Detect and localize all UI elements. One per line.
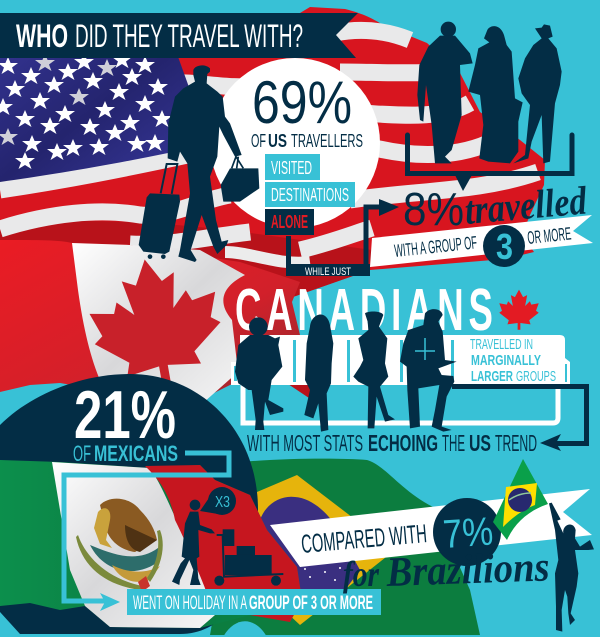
- text: travelled in marginally larger groups: LARGER: [471, 368, 513, 385]
- stat: 69% of US travellers: 69%: [252, 69, 352, 136]
- text: travelled in marginally larger groups: TRAVELLED IN: [470, 336, 533, 353]
- title banner: WHO: [16, 18, 68, 54]
- icon: woman holding flag: [549, 503, 594, 632]
- label: alone: ALONE: [271, 212, 308, 232]
- banner: compared with 7%: 7%: [442, 510, 495, 557]
- flag: United States: [0, 7, 545, 300]
- banner: compared with 7%: COMPARED WITH: [300, 518, 428, 559]
- stat: 21% of Mexicans: MEXICANS: [94, 441, 178, 466]
- icon: woman with luggage trolley: [172, 500, 283, 586]
- label: destinations: [265, 182, 355, 207]
- white circle callout: [210, 58, 380, 228]
- stat: 21% of Mexicans: [73, 377, 178, 466]
- speech bubble: x3: [200, 487, 236, 515]
- speech bubble: x3: X3: [215, 494, 230, 511]
- label: destinations: DESTINATIONS: [271, 185, 349, 205]
- text: travelled in marginally larger groups: [470, 336, 556, 385]
- title banner: DID THEY TRAVEL WITH?: [75, 18, 303, 54]
- label: visited: VISITED: [271, 158, 312, 178]
- text: travelled in marginally larger groups: GROUPS: [516, 368, 556, 385]
- text: echoing the US trend: US: [469, 430, 491, 456]
- title banner: [0, 13, 358, 58]
- stat: 69% of US travellers: TRAVELLERS: [291, 131, 363, 151]
- icon: plus: [415, 338, 435, 360]
- text: echoing the US trend: WITH MOST STATS: [247, 430, 363, 456]
- connector arrow: while just: WHILE JUST: [305, 266, 351, 278]
- bottom strip: [0, 635, 600, 637]
- bracket pointer: [408, 135, 572, 191]
- connector arrow: to US trend: [452, 386, 586, 451]
- flag: Mexico: [0, 460, 302, 628]
- text: echoing the US trend: ECHOING: [368, 430, 438, 456]
- script text: for Brazilians: for: [343, 554, 380, 594]
- stat: 21% of Mexicans: 21%: [74, 377, 176, 453]
- icon: small Brazilian flag: [493, 459, 548, 540]
- text: echoing the US trend: TREND: [495, 430, 537, 456]
- banner: group of 3: [370, 215, 593, 267]
- icon: Mexican eagle: [76, 499, 163, 592]
- text: echoing the US trend: THE: [442, 430, 465, 456]
- dark circle panel: [0, 374, 258, 634]
- script text: for Brazilians: Brazilions: [385, 544, 550, 596]
- text: travelled in marginally larger groups: MARGINALLY: [471, 352, 541, 369]
- icon: man walking with luggage: [139, 65, 259, 262]
- stat: 69% of US travellers: OF: [251, 131, 266, 151]
- banner: group of 3: WITH A GROUP OF: [393, 232, 478, 261]
- flag: Canada: [0, 240, 318, 405]
- icon: maple leaf: [499, 290, 539, 330]
- label bar: went on holiday: GROUP OF 3 OR MORE: [249, 593, 373, 614]
- connector arrow: Mexicans: [64, 453, 229, 611]
- teal hump bottom: [223, 621, 267, 637]
- label: visited: [265, 154, 320, 180]
- label bar: went on holiday: [127, 589, 381, 615]
- stat: 69% of US travellers: US: [268, 131, 287, 151]
- banner: group of 3: 3: [496, 226, 513, 267]
- banner: compared with 7%: [270, 489, 592, 567]
- seat panel: [231, 335, 570, 423]
- icon: seated people: [235, 309, 457, 432]
- icon: group of three travellers: [417, 22, 562, 163]
- heading: Canadians: CANADIANS: [235, 278, 493, 343]
- flag: Brazil: [210, 459, 480, 635]
- label: alone: [265, 209, 314, 235]
- heading: 8% travelled: 8%: [403, 183, 464, 235]
- heading: 8% travelled: [403, 177, 589, 235]
- connector arrow: while just: [286, 199, 399, 278]
- label bar: went on holiday: WENT ON HOLIDAY IN A: [133, 593, 247, 614]
- stat: 21% of Mexicans: OF: [73, 441, 91, 466]
